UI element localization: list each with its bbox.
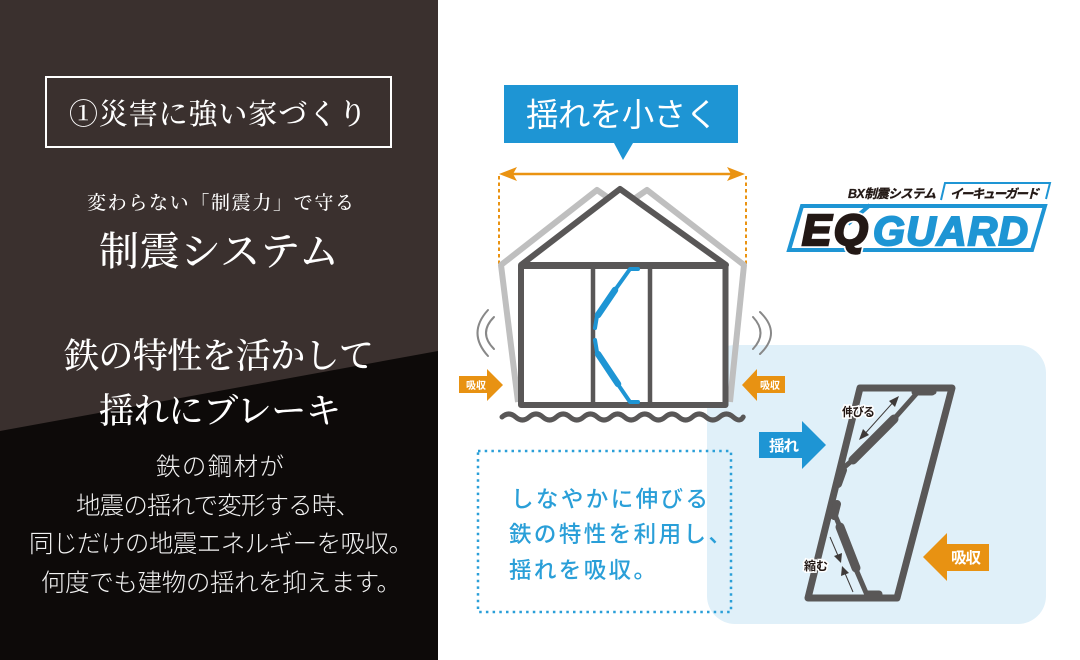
- arrow: absorb large: 吸収: [951, 549, 981, 567]
- arrow: absorb right: [742, 369, 785, 401]
- callout: dotted text box: 鉄の特性を利用し、: [509, 522, 731, 547]
- logo: EQ GUARD: [789, 183, 1050, 255]
- label: stretch: 伸びる: [842, 404, 875, 419]
- arrow: absorb left: 吸収: [466, 380, 486, 392]
- arrow: shaking: [759, 421, 826, 469]
- logo: EQ GUARD: EQ: [802, 206, 868, 255]
- heading: brake on shaking: 揺れにブレーキ: [99, 392, 341, 431]
- body text: 何度でも建物の揺れを抑えます。: [41, 569, 401, 597]
- callout: dotted text box: しなやかに伸びる: [511, 487, 708, 512]
- logo: EQ GUARD: GUARD: [873, 208, 1028, 254]
- arrow: absorb right: 吸収: [760, 380, 780, 392]
- panel: light blue detail background: [707, 345, 1046, 624]
- house: swaying ghost outlines: [501, 190, 744, 402]
- logo: EQ GUARD: EQ: [802, 206, 868, 255]
- lower brace: [834, 504, 880, 595]
- house: frame: [521, 189, 726, 405]
- callout: dotted text box: [478, 451, 731, 612]
- subheading: 変わらない「制震力」で守る: [87, 192, 354, 214]
- callout: reduce shaking: [504, 85, 738, 160]
- callout: reduce shaking: 揺れを小さく: [526, 97, 718, 133]
- title: 制震システム: [99, 229, 339, 274]
- body text: 地震の揺れで変形する時、: [76, 492, 360, 520]
- upper brace: [838, 392, 934, 484]
- ground wave: [502, 414, 743, 420]
- arrow: shaking: 揺れ: [769, 437, 799, 455]
- arrow: stretch: [859, 396, 899, 440]
- body text: 同じだけの地震エネルギーを吸収。: [29, 530, 413, 558]
- arrow: compress: [830, 537, 853, 592]
- arrow: width of sway: [499, 167, 746, 266]
- logo: EQ GUARD: イーキューガード: [950, 187, 1040, 201]
- house: blue steel brace: [595, 269, 638, 402]
- body text: [29, 453, 413, 597]
- icon: vibration arcs right: [753, 312, 771, 354]
- heading box: disaster-resistant home building: [46, 77, 391, 147]
- arrow: absorb left: [459, 369, 503, 401]
- icon: vibration arcs left: [478, 310, 494, 356]
- label: compress: 縮む: [804, 558, 828, 573]
- panel: left dark background: [0, 0, 438, 660]
- callout: dotted text box: 揺れを吸収。: [509, 558, 656, 583]
- arrow: absorb large: [923, 533, 989, 581]
- logo: EQ GUARD: BX制震システム: [848, 187, 936, 201]
- diagram: deformed frame: [808, 388, 952, 598]
- heading: brake on shaking: [64, 337, 374, 431]
- heading: brake on shaking: 鉄の特性を活かして: [64, 337, 374, 376]
- heading box: disaster-resistant home building: ①災害に強い家づくり: [69, 98, 367, 131]
- body text: 鉄の鋼材が: [156, 453, 284, 481]
